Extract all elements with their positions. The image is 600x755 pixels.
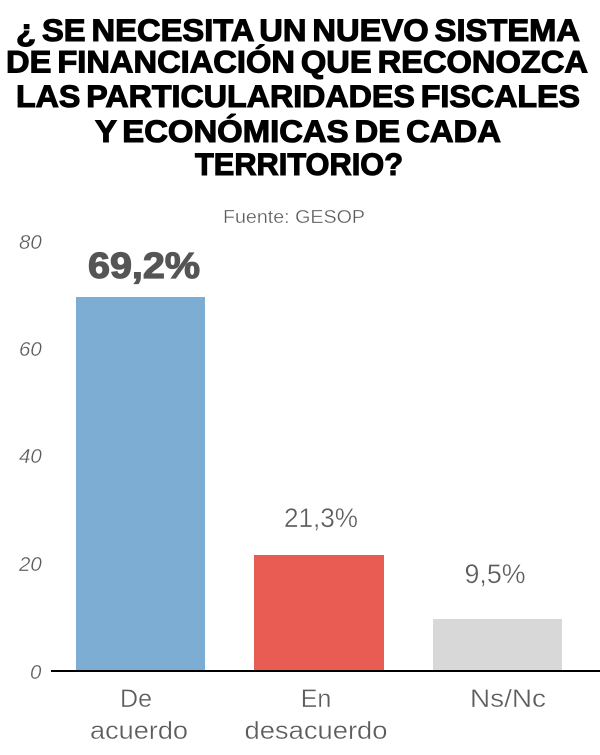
title: ¿ SE NECESITA UN NUEVO SISTEMA bbox=[16, 12, 580, 48]
y axis labels: 40 bbox=[19, 445, 42, 468]
title bbox=[6, 12, 588, 182]
value label: 9,5%: 9,5% bbox=[464, 559, 526, 589]
category label: Ns/Nc: Ns/Nc bbox=[470, 685, 546, 713]
y axis labels: 60 bbox=[19, 338, 42, 361]
y axis labels: 20 bbox=[18, 553, 42, 576]
value label: 21,3%: 21,3% bbox=[284, 503, 358, 533]
bar: En desacuerdo bbox=[254, 555, 384, 671]
y axis labels bbox=[18, 231, 42, 684]
title: TERRITORIO? bbox=[195, 146, 403, 182]
bar: De acuerdo bbox=[76, 297, 205, 671]
y axis labels: 0 bbox=[30, 661, 42, 684]
title: Y ECONÓMICAS DE CADA bbox=[95, 113, 501, 149]
category label: En desacuerdo: desacuerdo bbox=[244, 717, 388, 745]
bar: Ns/Nc bbox=[433, 619, 562, 671]
source note: Fuente: GESOP bbox=[223, 207, 365, 227]
x axis line bbox=[51, 670, 600, 672]
category label: En desacuerdo bbox=[244, 685, 388, 745]
title: LAS PARTICULARIDADES FISCALES bbox=[16, 78, 580, 114]
category label: De acuerdo: De bbox=[120, 685, 152, 713]
y axis labels: 80 bbox=[19, 231, 42, 254]
category label: En desacuerdo: En bbox=[301, 685, 331, 713]
category label: De acuerdo: acuerdo bbox=[90, 717, 188, 745]
category label: De acuerdo bbox=[90, 685, 188, 745]
value label: 69,2%: 69,2% bbox=[88, 245, 200, 286]
title: DE FINANCIACIÓN QUE RECONOZCA bbox=[6, 44, 588, 80]
